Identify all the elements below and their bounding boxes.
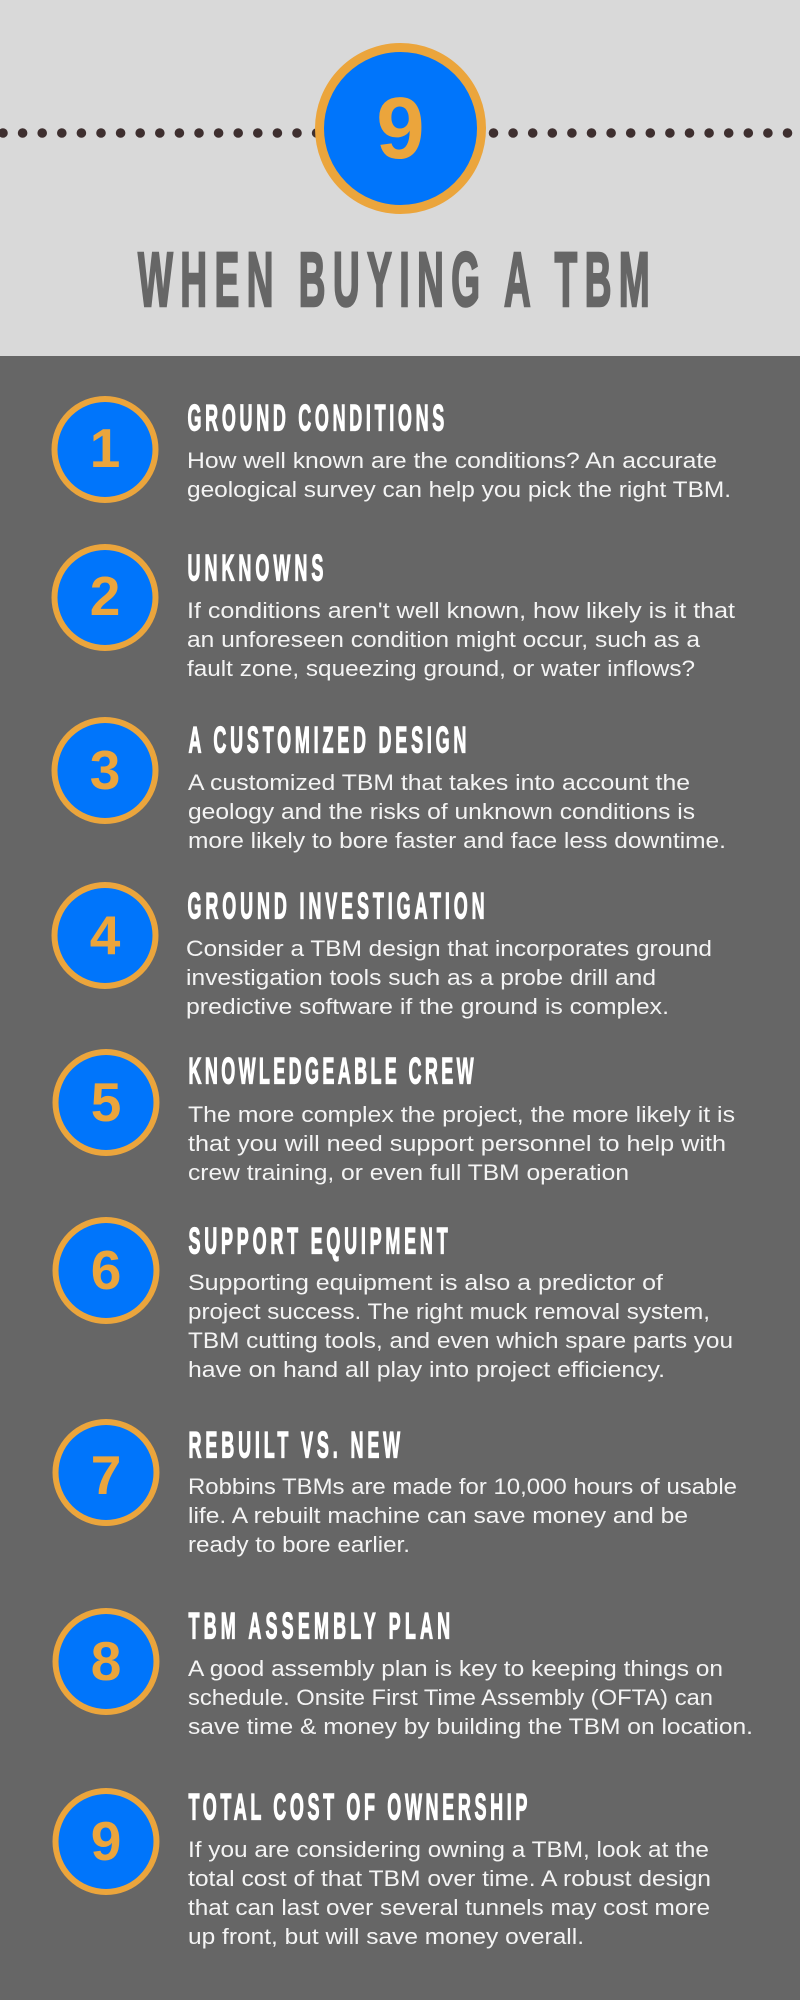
number badge 1	[54, 399, 156, 500]
heading 1: GROUND CONDITIONS	[188, 397, 444, 439]
description 5	[188, 1102, 735, 1185]
hero number badge	[320, 48, 482, 210]
description 5: crew training, or even full TBM operation	[188, 1160, 629, 1185]
title: WHEN BUYING A TBM	[138, 236, 650, 323]
description 9: that can last over several tunnels may cost more	[188, 1895, 710, 1920]
description 7: ready to bore earlier.	[188, 1532, 410, 1557]
heading 4: GROUND INVESTIGATION	[188, 885, 485, 927]
number badge 4: 4	[90, 904, 121, 966]
description 4: investigation tools such as a probe drill and	[186, 965, 656, 990]
item 9: total cost of ownership	[56, 1786, 711, 1949]
dotted line left	[3, 128, 325, 138]
heading 6: SUPPORT EQUIPMENT	[188, 1220, 448, 1262]
number badge 7	[56, 1422, 156, 1523]
number badge 2	[54, 547, 156, 648]
description 9: up front, but will save money overall.	[188, 1924, 584, 1949]
item 3: a customized design	[54, 719, 726, 853]
dotted line right	[494, 128, 800, 138]
description 9: If you are considering owning a TBM, look at the	[188, 1837, 709, 1862]
description 3: more likely to bore faster and face less downtime.	[188, 828, 726, 853]
header panel background	[0, 0, 800, 356]
description 5: that you will need support personnel to help with	[188, 1131, 726, 1156]
description 8: save time & money by building the TBM on location.	[188, 1714, 753, 1739]
number badge 6	[56, 1220, 156, 1321]
item 7: rebuilt vs. new	[56, 1422, 737, 1557]
number badge 5	[56, 1052, 156, 1153]
description 1	[187, 448, 731, 502]
description 1: How well known are the conditions? An accurate	[187, 448, 717, 473]
number badge 3: 3	[90, 739, 120, 801]
description 5: The more complex the project, the more likely it is	[188, 1102, 735, 1127]
description 2	[187, 598, 735, 681]
description 6: Supporting equipment is also a predictor of	[188, 1270, 664, 1295]
item 2: unknowns	[54, 547, 735, 681]
description 4: Consider a TBM design that incorporates ground	[186, 936, 712, 961]
description 4: predictive software if the ground is complex.	[186, 994, 669, 1019]
number badge 8	[56, 1611, 156, 1712]
description 6: have on hand all play into project efficiency.	[188, 1357, 665, 1382]
description 8: schedule. Onsite First Time Assembly (OFTA) can	[188, 1685, 713, 1710]
number badge 2: 2	[90, 565, 120, 627]
description 8	[188, 1656, 753, 1739]
description 3: geology and the risks of unknown conditions is	[188, 799, 695, 824]
description 9: total cost of that TBM over time. A robust design	[188, 1866, 711, 1891]
description 7: Robbins TBMs are made for 10,000 hours of usable	[188, 1474, 737, 1499]
heading 8: TBM ASSEMBLY PLAN	[188, 1605, 450, 1647]
heading 7: REBUILT VS. NEW	[188, 1424, 400, 1466]
number badge 6: 6	[91, 1239, 121, 1301]
number badge 9	[56, 1791, 156, 1892]
item 5: knowledgeable crew	[56, 1050, 735, 1185]
item 6: support equipment	[56, 1220, 733, 1382]
description 7: life. A rebuilt machine can save money and be	[188, 1503, 688, 1528]
number badge 7: 7	[91, 1444, 121, 1506]
description 6	[188, 1270, 733, 1382]
item 4: ground investigation	[54, 885, 712, 1019]
number badge 4	[54, 885, 156, 986]
heading 9: TOTAL COST OF OWNERSHIP	[188, 1786, 527, 1828]
item 1: ground conditions	[54, 397, 731, 502]
description 3: A customized TBM that takes into account the	[188, 770, 690, 795]
description 8: A good assembly plan is key to keeping things on	[188, 1656, 723, 1681]
heading 5: KNOWLEDGEABLE CREW	[188, 1050, 474, 1092]
number badge 8: 8	[91, 1630, 121, 1692]
description 4	[186, 936, 712, 1019]
description 2: an unforeseen condition might occur, such as a	[187, 627, 701, 652]
description 2: If conditions aren't well known, how likely is it that	[187, 598, 735, 623]
description 9	[188, 1837, 711, 1949]
description 6: project success. The right muck removal system,	[188, 1299, 710, 1324]
item 8: tbm assembly plan	[56, 1605, 753, 1739]
number badge 1: 1	[90, 417, 120, 479]
number badge 3	[54, 720, 156, 821]
description 6: TBM cutting tools, and even which spare parts you	[188, 1328, 733, 1353]
number badge 5: 5	[91, 1071, 121, 1133]
heading 2: UNKNOWNS	[188, 547, 323, 589]
hero number badge: 9	[376, 80, 425, 177]
description 1: geological survey can help you pick the right TBM.	[187, 477, 731, 502]
number badge 9: 9	[91, 1810, 121, 1872]
description 7	[188, 1474, 737, 1557]
description 3	[188, 770, 726, 853]
heading 3: A CUSTOMIZED DESIGN	[188, 719, 466, 761]
description 2: fault zone, squeezing ground, or water inflows?	[187, 656, 695, 681]
